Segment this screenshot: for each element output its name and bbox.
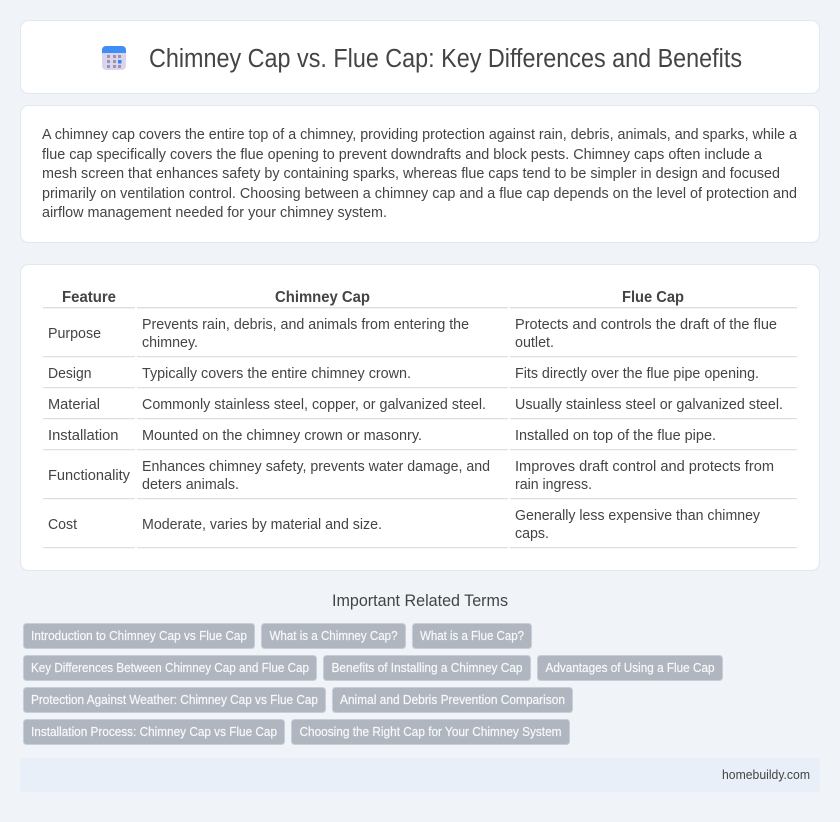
table header: Chimney Cap [275, 289, 370, 306]
tag: Introduction to Chimney Cap vs Flue Cap [31, 628, 247, 643]
row: installation: Installation [48, 427, 118, 444]
panel: introduction paragraph [20, 106, 820, 242]
row: functionality: Enhances chimney safety, prevents water damage, and [142, 458, 490, 475]
tag [24, 624, 254, 648]
row: purpose [48, 316, 777, 351]
footer domain: homebuildy.com [722, 767, 810, 782]
tag: What is a Flue Cap? [420, 628, 524, 643]
row: functionality [48, 458, 774, 493]
tag [332, 688, 572, 712]
tag [24, 720, 284, 744]
heading: important related terms: Important Related Terms [332, 591, 508, 610]
table header: Feature [62, 289, 116, 306]
row: design: Design [48, 365, 92, 382]
row: installation: Mounted on the chimney crown or masonry. [142, 427, 422, 444]
row: functionality: deters animals. [142, 476, 239, 493]
tag: Benefits of Installing a Chimney Cap [332, 660, 522, 675]
tag [412, 624, 532, 648]
paragraph text [42, 126, 798, 221]
tag [262, 624, 406, 648]
header panel [20, 20, 820, 94]
related terms tags [24, 624, 722, 744]
paragraph text: A chimney cap covers the entire top of a chimney, providing protection against rain, debris, animals, and sparks, while a [42, 126, 798, 143]
tag [324, 656, 530, 680]
row: material: Material [48, 396, 100, 413]
tag [24, 688, 326, 712]
row: material: Commonly stainless steel, copper, or galvanized steel. [142, 396, 486, 413]
panel: comparison table [20, 264, 820, 570]
tag: Advantages of Using a Flue Cap [546, 660, 714, 675]
title: Chimney Cap vs. Flue Cap: Key Differences and Benefits [149, 45, 742, 73]
row: cost: caps. [515, 525, 549, 542]
row: purpose: chimney. [142, 334, 198, 351]
row: design [48, 365, 759, 382]
row: material: Usually stainless steel or galvanized steel. [515, 396, 783, 413]
row: functionality: rain ingress. [515, 476, 592, 493]
row: material [48, 396, 783, 413]
table rules [43, 307, 797, 548]
row: installation: Installed on top of the flue pipe. [515, 427, 716, 444]
row: cost: Moderate, varies by material and size. [142, 516, 382, 533]
row: cost: Cost [48, 516, 78, 533]
paragraph text: primarily on ventilation control. Choosing between a chimney cap and a flue cap depends on the level of protection and [42, 185, 797, 202]
row: design: Typically covers the entire chimney crown. [142, 365, 411, 382]
row: purpose: Purpose [48, 325, 101, 342]
row: purpose: outlet. [515, 334, 554, 351]
icon: calendar grid [102, 46, 126, 70]
tag [538, 656, 722, 680]
table header: Flue Cap [622, 289, 684, 306]
row: functionality: Functionality [48, 467, 130, 484]
row: purpose: Prevents rain, debris, and animals from entering the [142, 316, 469, 333]
tag: Choosing the Right Cap for Your Chimney System [300, 724, 562, 739]
tag: What is a Chimney Cap? [270, 628, 398, 643]
row: functionality: Improves draft control and protects from [515, 458, 774, 475]
row: installation [48, 427, 716, 444]
row: cost: Generally less expensive than chimney [515, 507, 760, 524]
paragraph text: flue cap specifically covers the flue opening to prevent downdrafts and block pests. Chimney caps often include a [42, 146, 763, 163]
tag [24, 656, 316, 680]
row: cost [48, 507, 760, 542]
row: purpose: Protects and controls the draft of the flue [515, 316, 777, 333]
tag: Installation Process: Chimney Cap vs Flue Cap [31, 724, 277, 739]
paragraph text: mesh screen that enhances safety by containing sparks, whereas flue caps tend to be simpler in design and focused [42, 165, 780, 182]
tag: Protection Against Weather: Chimney Cap vs Flue Cap [31, 692, 318, 707]
tag: Key Differences Between Chimney Cap and Flue Cap [31, 660, 309, 675]
tag: Animal and Debris Prevention Comparison [340, 692, 565, 707]
table header [62, 289, 684, 306]
tag [292, 720, 570, 744]
footer [20, 758, 820, 792]
row: design: Fits directly over the flue pipe opening. [515, 365, 759, 382]
paragraph text: airflow management needed for your chimney system. [42, 204, 387, 221]
